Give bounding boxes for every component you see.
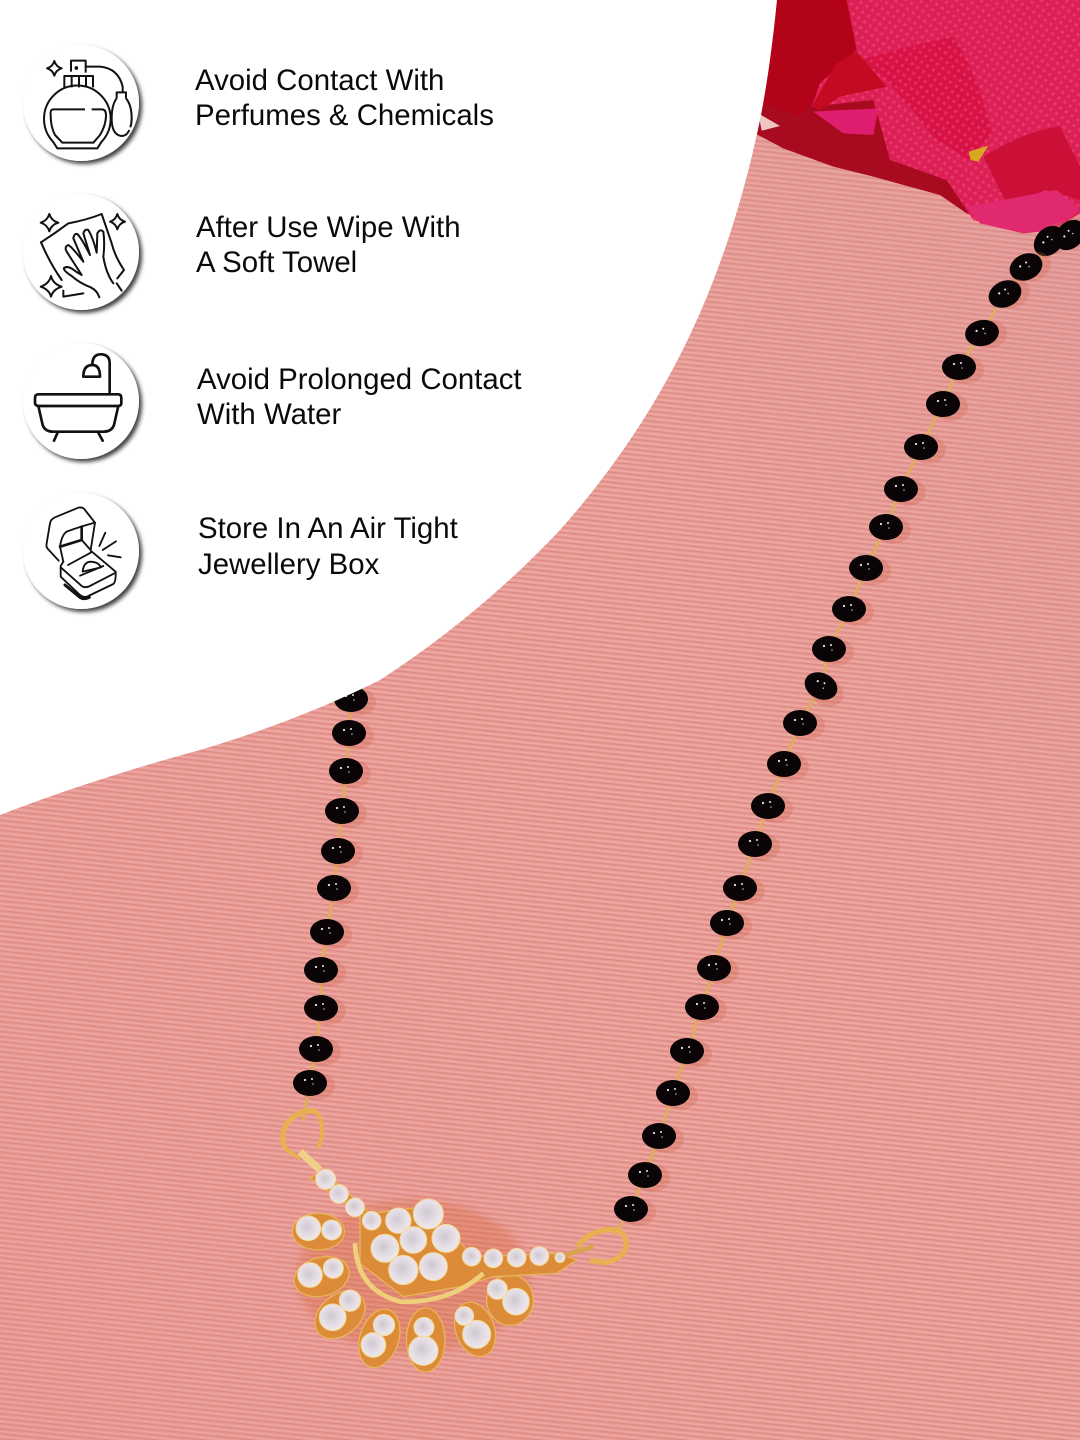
icon: perfume bottle (23, 45, 139, 161)
text: perfumes: Perfumes & Chemicals (195, 99, 494, 132)
white curved panel (0, 0, 777, 815)
text: perfumes: Avoid Contact With (195, 64, 444, 97)
care item 3: water (23, 343, 522, 459)
icon: hand wiping with towel (23, 194, 139, 310)
icon: bathtub with shower (23, 343, 139, 459)
text: storage: Store In An Air Tight (198, 512, 458, 545)
text: wipe: A Soft Towel (196, 246, 357, 279)
text: wipe: After Use Wipe With (196, 211, 461, 244)
care item 2: wipe (23, 194, 461, 310)
gold petals (290, 1170, 577, 1373)
photo: red rose at top right (755, 0, 1080, 233)
icon: open ring box (23, 493, 139, 609)
necklace: right strand black beads (614, 208, 1080, 1226)
white stones (296, 1169, 565, 1365)
care item 1: perfumes (23, 45, 494, 161)
gold links (283, 1111, 627, 1302)
text: water: Avoid Prolonged Contact (197, 363, 522, 396)
text: water: With Water (197, 398, 341, 431)
care item 4: storage (23, 493, 458, 609)
necklace: gold chain (303, 235, 1070, 1235)
text: storage: Jewellery Box (198, 548, 380, 581)
necklace: left strand black beads (293, 686, 376, 1100)
pendant: gold setting with white stones (283, 1111, 627, 1373)
